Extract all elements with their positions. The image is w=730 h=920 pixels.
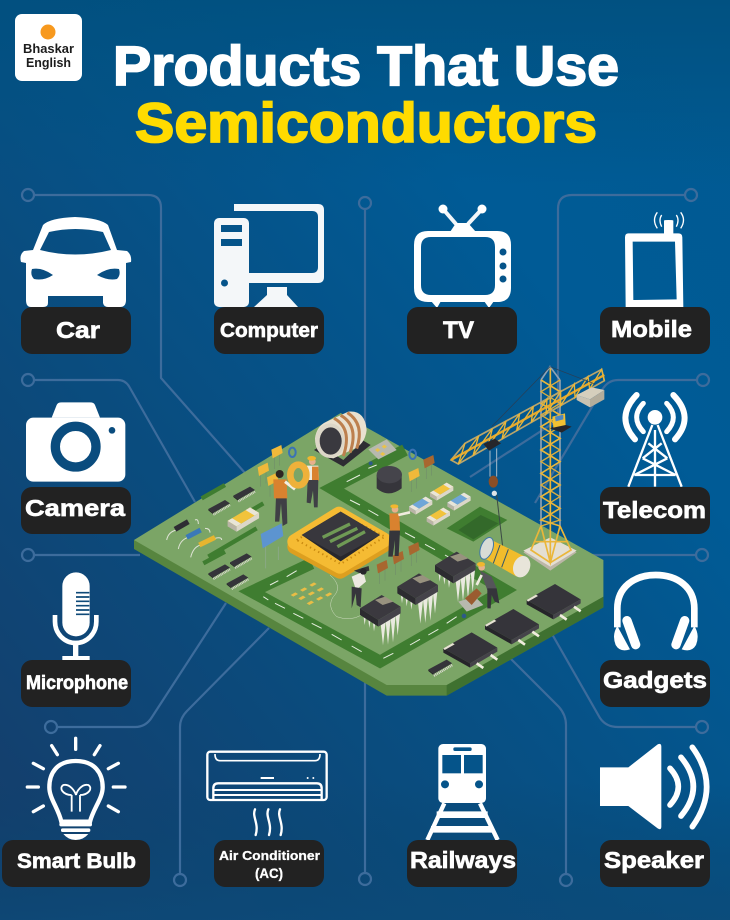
icon: microphone (55, 572, 96, 660)
kneeling worker (352, 566, 369, 608)
crane tower (531, 367, 571, 563)
item: gadgets (600, 575, 710, 707)
worker holding toroid (273, 456, 319, 526)
item: telecom (600, 395, 710, 534)
item: TV (407, 204, 517, 354)
label: Mobile: Mobile (611, 316, 692, 342)
icon: car (20, 217, 131, 307)
icon: speaker (600, 744, 707, 829)
wheelbarrow with parts (368, 439, 397, 465)
title: Semiconductors (135, 91, 597, 154)
label: Air Conditioner (AC): (AC) (255, 865, 283, 881)
label: TV: TV (443, 317, 474, 344)
icon: mobile phone (625, 212, 683, 307)
central processor chip (295, 512, 385, 571)
pit (447, 507, 507, 542)
label: Air Conditioner (AC): Air Conditioner (219, 848, 320, 863)
icon: telecom tower (625, 395, 685, 487)
leaded capacitors (258, 445, 435, 584)
icon: TV (414, 204, 511, 308)
roads (202, 450, 505, 662)
item: microphone (21, 572, 131, 707)
label: Car: Car (56, 317, 100, 343)
label: Computer (214, 307, 324, 354)
logo (15, 14, 82, 81)
yellow cylinder (477, 536, 533, 580)
surface-mount capacitors (228, 483, 471, 532)
small chips (208, 487, 452, 676)
trolley and hook (483, 439, 503, 547)
label: Microphone: Microphone (26, 673, 128, 694)
capacitor drum (377, 466, 402, 493)
operator cab (550, 413, 572, 433)
icon: train (427, 744, 498, 840)
icon: computer (214, 204, 324, 307)
item: mobile (600, 212, 710, 354)
circuit board illustration (134, 412, 603, 696)
item: car (20, 217, 131, 354)
label: Gadgets: Gadgets (603, 667, 707, 693)
item: railways (407, 744, 517, 887)
integrated circuits (360, 552, 476, 645)
item: computer (214, 204, 324, 354)
label: Smart Bulb (2, 840, 150, 887)
icon: camera (26, 402, 125, 482)
label: Air Conditioner (AC) (214, 840, 324, 887)
worker with wheelbarrow (458, 562, 499, 618)
item: air conditioner (207, 752, 327, 887)
tower crane with cylinder (451, 367, 604, 580)
worker near chip (388, 504, 410, 557)
item: camera (21, 402, 131, 534)
item: smart bulb (2, 738, 150, 887)
label: Mobile (600, 307, 710, 354)
label: Telecom: Telecom (603, 497, 706, 523)
board slab (134, 413, 603, 696)
title (113, 34, 619, 154)
counterweight (577, 387, 604, 407)
logo: English (26, 56, 71, 70)
label: TV (407, 307, 517, 354)
crane base (523, 537, 577, 571)
label: Speaker (600, 840, 710, 887)
solder grid (291, 575, 362, 619)
power transistors (443, 584, 581, 668)
label: Speaker: Speaker (604, 847, 704, 873)
circuit lines (22, 189, 709, 886)
item: speaker (600, 744, 710, 887)
icon: light bulb (27, 738, 125, 840)
logo: Bhaskar (23, 42, 74, 56)
crane jib (451, 367, 604, 464)
label: Camera: Camera (25, 495, 125, 521)
icon: air conditioner (207, 752, 327, 835)
copper coil (314, 412, 371, 467)
label: Railways (407, 840, 517, 887)
resistors (167, 520, 222, 557)
icon: headphones (614, 575, 698, 650)
label: Railways: Railways (410, 847, 516, 873)
label: Smart Bulb: Smart Bulb (17, 850, 136, 873)
title: Products That Use (113, 34, 619, 97)
label: Computer: Computer (220, 320, 318, 342)
